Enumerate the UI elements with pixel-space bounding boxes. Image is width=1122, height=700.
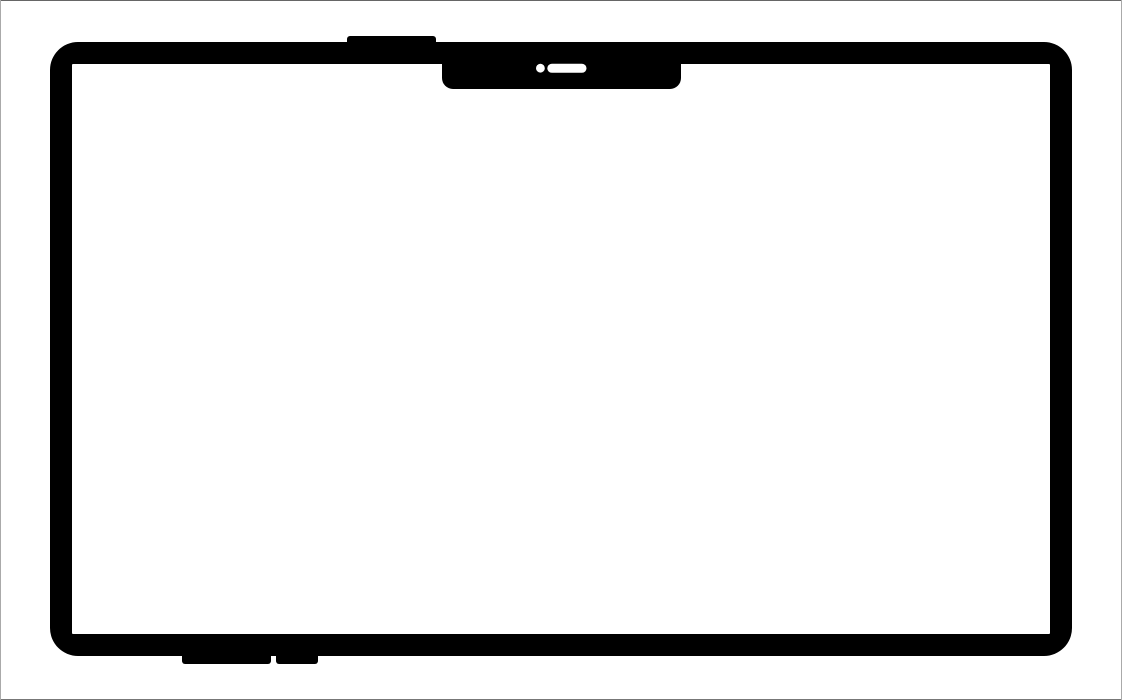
notch with camera	[442, 60, 681, 89]
bezel frame	[50, 42, 1072, 656]
bottom left button	[182, 650, 271, 664]
sensor pill	[547, 64, 586, 73]
camera lens	[536, 64, 545, 73]
notch	[442, 60, 681, 89]
bottom right button	[276, 650, 318, 664]
top power button	[347, 36, 436, 48]
